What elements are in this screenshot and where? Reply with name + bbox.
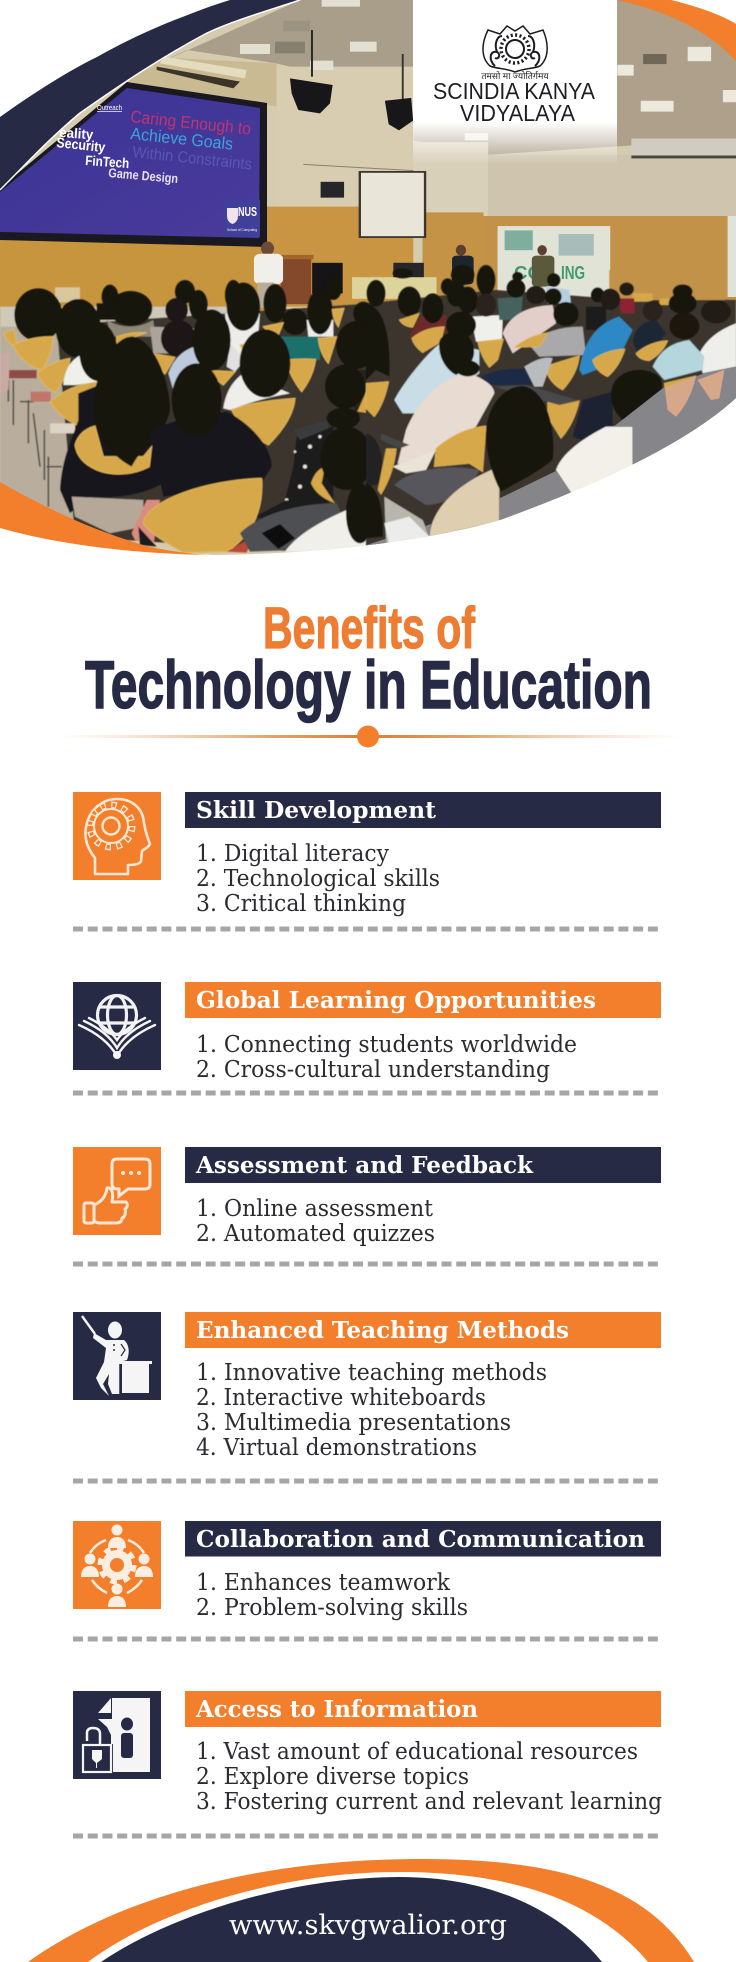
back row bbox=[14, 277, 342, 358]
icon: school emblem bbox=[483, 26, 547, 72]
list: 2. Technological skills bbox=[196, 866, 440, 892]
orange swoosh bottom left bbox=[0, 482, 205, 555]
projection screen bbox=[0, 82, 267, 247]
poster text: ING bbox=[561, 263, 585, 283]
heading bar bbox=[185, 1691, 661, 1727]
list: 1. Connecting students worldwide bbox=[196, 1032, 577, 1058]
far row bbox=[367, 265, 693, 317]
white hairline beside navy swoosh bbox=[0, 0, 300, 190]
screen text: Within Constraints bbox=[132, 144, 253, 174]
list: 1. Innovative teaching methods bbox=[196, 1360, 547, 1386]
white below orange swoosh, bottom left bbox=[0, 528, 213, 570]
heading bar bbox=[185, 982, 661, 1018]
navy dome bbox=[101, 1877, 602, 1962]
heading bar bbox=[185, 792, 661, 828]
screen text: Caring Enough to bbox=[130, 107, 252, 139]
orange swoosh top right bbox=[617, 0, 736, 61]
students and chairs, left half bbox=[0, 277, 377, 557]
screen text: eality bbox=[59, 124, 94, 142]
school name: SCINDIA KANYA bbox=[433, 78, 596, 104]
front row bbox=[556, 427, 633, 495]
panel: skill development bbox=[73, 792, 661, 929]
title bbox=[85, 596, 652, 723]
list bbox=[196, 841, 440, 917]
hero photo: room walls and ceiling bbox=[0, 0, 736, 560]
heading bar: Collaboration and Communication bbox=[196, 1526, 645, 1553]
list bbox=[196, 1032, 577, 1083]
orange arc bbox=[28, 1859, 694, 1962]
icon: head with gear bbox=[73, 792, 161, 880]
list: 2. Interactive whiteboards bbox=[196, 1385, 486, 1411]
panel: assessment and feedback bbox=[73, 1147, 661, 1264]
list: 3. Multimedia presentations bbox=[196, 1410, 511, 1436]
website: www.skvgwalior.org bbox=[229, 1910, 507, 1941]
list bbox=[196, 1570, 468, 1621]
heading bar bbox=[185, 1312, 661, 1348]
room fixtures: speakers, clock, whiteboard, poster bbox=[254, 30, 736, 308]
icon: thumbs up and chat bubble bbox=[73, 1147, 161, 1235]
heading bar: Skill Development bbox=[196, 797, 436, 824]
screen text: Achieve Goals bbox=[130, 124, 234, 154]
panel: access to information bbox=[73, 1691, 662, 1836]
heading bar: Assessment and Feedback bbox=[195, 1152, 534, 1179]
screen text: Security bbox=[56, 134, 106, 155]
list: 1. Vast amount of educational resources bbox=[196, 1739, 638, 1765]
motto: तमसो मा ज्योतिर्गमय bbox=[481, 70, 549, 83]
students and chairs, right half bbox=[366, 265, 736, 550]
screen text: NUS bbox=[238, 204, 257, 219]
list bbox=[196, 1360, 547, 1461]
list: 2. Automated quizzes bbox=[196, 1221, 435, 1247]
poster text bbox=[514, 245, 585, 286]
heading bar: Enhanced Teaching Methods bbox=[196, 1317, 569, 1344]
icon: document, info mark and open lock bbox=[73, 1691, 161, 1779]
icon: people around a gear bbox=[73, 1521, 161, 1609]
back chairs bbox=[4, 308, 344, 427]
screen text bbox=[56, 105, 257, 232]
white gap bbox=[88, 1872, 648, 1962]
panel: enhanced teaching bbox=[73, 1312, 661, 1481]
screen text: School of Computing bbox=[227, 227, 257, 232]
third row bbox=[60, 383, 163, 513]
list: 3. Fostering current and relevant learning bbox=[196, 1789, 662, 1815]
panel: global learning bbox=[73, 982, 661, 1093]
title: Benefits of bbox=[263, 596, 475, 661]
screen text: Outreach bbox=[97, 105, 122, 112]
chairs bbox=[399, 313, 668, 390]
footer band bbox=[28, 1859, 694, 1962]
title divider bbox=[60, 726, 680, 748]
logo plate bbox=[413, 0, 617, 165]
list: 3. Critical thinking bbox=[196, 891, 406, 917]
icon: teacher with pointer at desk bbox=[73, 1312, 161, 1400]
school name bbox=[433, 78, 596, 126]
school name: VIDYALAYA bbox=[460, 100, 576, 126]
screen text: Game Design bbox=[108, 165, 179, 186]
list: 1. Online assessment bbox=[196, 1196, 434, 1222]
list: 1. Enhances teamwork bbox=[196, 1570, 451, 1596]
list: 1. Digital literacy bbox=[196, 841, 389, 867]
poster text: CO bbox=[514, 263, 542, 283]
mid row bbox=[366, 303, 390, 380]
front chair, desk and girl bbox=[132, 500, 160, 547]
screen text: FinTech bbox=[85, 152, 130, 171]
second row bbox=[63, 353, 97, 385]
list: 2. Cross-cultural understanding bbox=[196, 1057, 550, 1083]
icon: globe and open book bbox=[73, 982, 161, 1070]
translucent grey sweep bbox=[345, 362, 736, 552]
panel: collaboration bbox=[73, 1521, 661, 1639]
heading bar: Access to Information bbox=[195, 1696, 478, 1723]
list bbox=[196, 1739, 662, 1815]
navy swoosh top left bbox=[0, 0, 300, 190]
heading bar: Global Learning Opportunities bbox=[196, 987, 596, 1014]
list: 4. Virtual demonstrations bbox=[196, 1435, 477, 1461]
heading bar bbox=[185, 1147, 661, 1183]
list: 2. Explore diverse topics bbox=[196, 1764, 469, 1790]
list: 2. Problem-solving skills bbox=[196, 1595, 468, 1621]
list bbox=[196, 1196, 435, 1247]
